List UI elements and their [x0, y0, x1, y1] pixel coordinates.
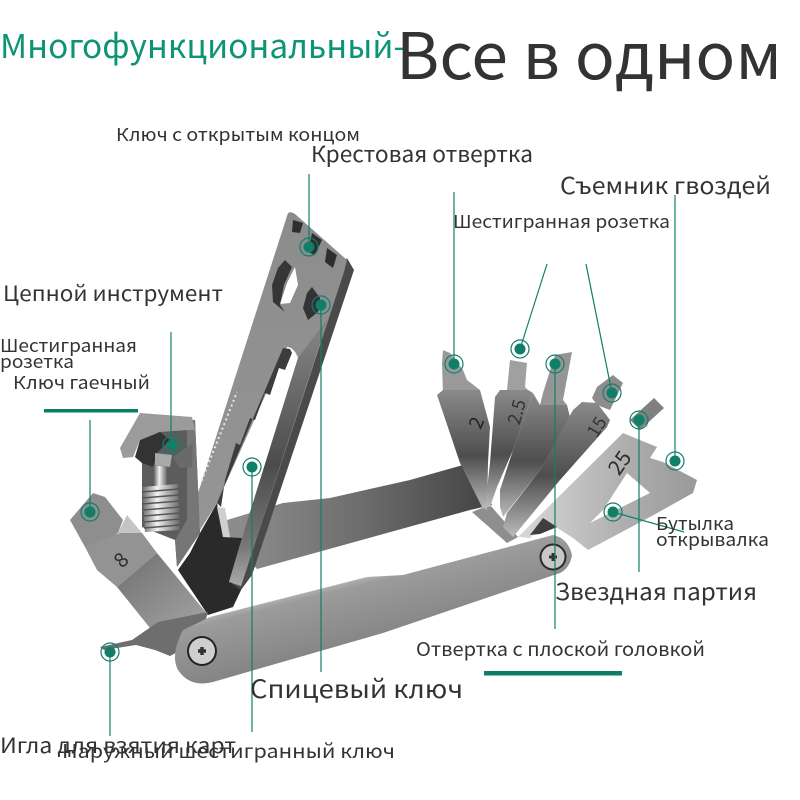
marker: star bit: [630, 411, 648, 429]
title: all in one: Все в одном: [396, 6, 782, 98]
marker: hex socket: [81, 503, 99, 521]
front handle: [175, 535, 572, 684]
torx tip: [630, 398, 664, 430]
number labels on keys: 25: [600, 444, 638, 481]
label: bottle opener: Бутылка: [656, 510, 734, 536]
chain tool side: [175, 420, 200, 567]
label: hex socket left: [0, 332, 137, 374]
label: bottle opener: [656, 510, 769, 552]
back handle: [227, 463, 492, 569]
chain tool hook block: [120, 413, 195, 458]
push pin head: [155, 453, 172, 467]
serrated edge: [198, 392, 237, 490]
marker: chain tool: [163, 436, 181, 454]
stepped slot wall: [217, 348, 292, 507]
hex socket piece with number 8: [70, 493, 208, 628]
left rivet: [187, 636, 217, 666]
label: card needle: Игла для взятия карт: [0, 730, 236, 760]
right jaw: [173, 443, 193, 468]
number 8: 8: [106, 545, 134, 573]
label: nail puller: Съемник гвоздей: [560, 167, 771, 201]
chain tool: [120, 413, 200, 567]
title: multifunctional: Многофункциональный-: [0, 20, 405, 68]
hook inner arch: [135, 432, 170, 467]
marker: external hex wrench: [243, 458, 261, 476]
plate rear edge: [232, 258, 354, 590]
label: hex socket top: Шестигранная розетка: [453, 208, 670, 234]
chrome slot foot: [217, 507, 230, 537]
label: chain tool: Цепной инструмент: [3, 278, 223, 308]
label: external hex wrench: Наружный шестигранный ключ: [62, 737, 395, 764]
label: hex socket left: Шестигранная: [0, 332, 137, 358]
lower right band of plate: [229, 318, 328, 586]
label: phillips screwdriver: Крестовая отвертка: [311, 137, 533, 169]
push pin shaft: [154, 465, 167, 486]
key tip 2: [442, 350, 480, 395]
chain tool body: [142, 420, 200, 567]
marker: open end wrench: [300, 238, 318, 256]
plate face: [198, 212, 347, 586]
white main hole: [280, 267, 298, 304]
threaded screw: [142, 484, 180, 532]
key 2.5: [485, 390, 533, 507]
flat key: [500, 393, 570, 517]
toothed left hole: [272, 260, 292, 312]
marker: spoke wrench: [312, 296, 330, 314]
marker: nail puller: [666, 452, 684, 470]
bulge: [118, 515, 142, 540]
spoke wrench plate: [198, 212, 354, 590]
marker: hex socket left: [511, 340, 529, 358]
tool illustration: [70, 212, 697, 683]
marker: card needle: [101, 643, 119, 661]
flat screwdriver tip: [540, 352, 572, 405]
number labels on keys: 2.5: [500, 396, 532, 427]
key 2: [437, 390, 490, 510]
key tip 15: [592, 375, 623, 410]
dark joint: [530, 518, 557, 535]
leader lines: [90, 174, 684, 736]
label: spoke wrench: Спицевый ключ: [250, 670, 463, 706]
label: open end wrench: Ключ с открытым концом: [116, 121, 360, 147]
label: hex socket left: розетка: [0, 348, 74, 374]
right rivet: [540, 544, 566, 570]
marker: flat screwdriver: [546, 355, 564, 373]
top notches: [292, 220, 337, 268]
key 15: [503, 402, 610, 537]
number labels on keys: [461, 396, 638, 481]
fan of hex keys: [437, 350, 697, 550]
accent bar: bottom: [484, 671, 622, 676]
marker: phillips screwdriver: [445, 355, 463, 373]
lower body: [117, 553, 208, 628]
key tip 2.5: [507, 360, 528, 390]
plate 25 with bottle opener: [518, 433, 697, 550]
label: wrench: Ключ гаечный: [13, 369, 150, 395]
fan base: [472, 505, 518, 543]
hex tip: [70, 493, 123, 547]
marker: bottle opener: [604, 503, 622, 521]
accent bar: left: [44, 409, 138, 412]
black underside of plate: [178, 503, 252, 615]
marker: hex socket right: [603, 384, 621, 402]
label: bottle opener: открывалка: [656, 526, 769, 552]
number labels on keys: 15: [580, 411, 612, 442]
upper body: [85, 533, 157, 587]
toothed right hole: [303, 287, 320, 320]
label: flat screwdriver: Отвертка с плоской головкой: [416, 635, 705, 662]
label: star bit: Звездная партия: [555, 573, 757, 607]
number labels on keys: 2: [461, 412, 490, 432]
spike needle: [100, 612, 208, 656]
